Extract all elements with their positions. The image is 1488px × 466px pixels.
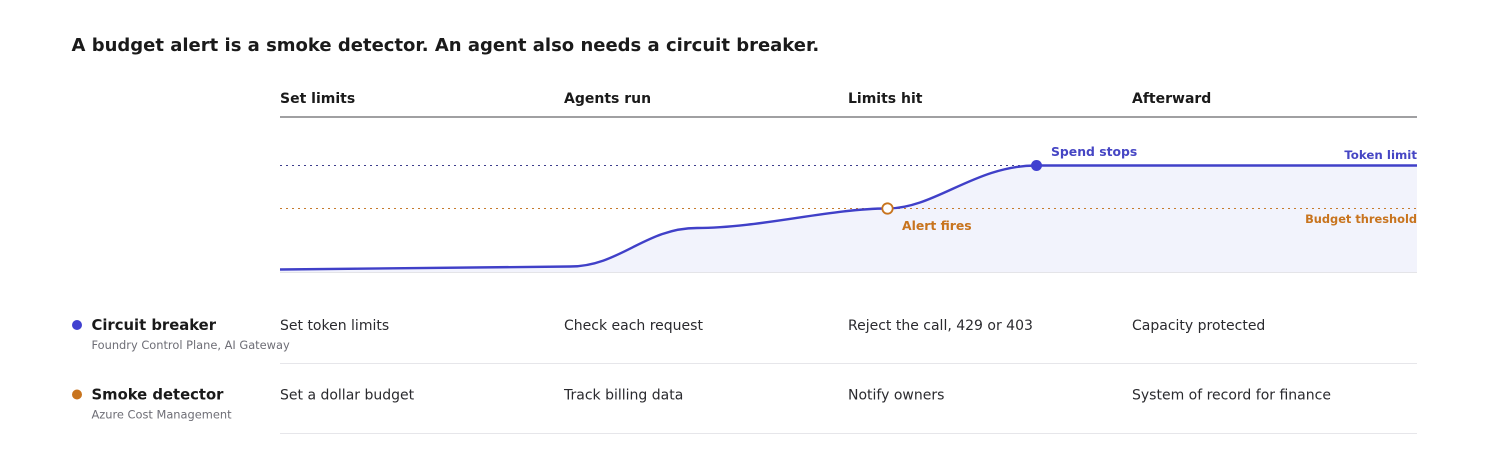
budget threshold dotted line bbox=[280, 208, 1417, 210]
spend line bbox=[280, 166, 1417, 270]
stop marker bbox=[1031, 160, 1042, 171]
row cells: Set token limits bbox=[280, 318, 389, 334]
row: smoke detector bbox=[72, 386, 1331, 422]
row: circuit breaker bbox=[72, 317, 1265, 352]
token limit dotted line bbox=[280, 164, 1036, 166]
row cells: Set a dollar budget bbox=[280, 388, 415, 404]
title: A budget alert is a smoke detector. An agent also needs a circuit breaker. bbox=[72, 35, 819, 56]
area under curve bbox=[280, 166, 1417, 272]
stage headers: Limits hit bbox=[848, 91, 923, 107]
row subtitle: Azure Cost Management bbox=[92, 408, 232, 422]
stage headers bbox=[280, 91, 1211, 107]
row cells bbox=[280, 388, 1331, 404]
legend dot bbox=[72, 320, 82, 330]
stage headers: Afterward bbox=[1132, 91, 1211, 107]
stage headers: Set limits bbox=[280, 91, 355, 107]
row subtitle: Foundry Control Plane, AI Gateway bbox=[92, 338, 290, 352]
label: budget threshold: Budget threshold bbox=[1305, 212, 1417, 226]
row cells: Reject the call, 429 or 403 bbox=[848, 318, 1033, 334]
row cells: System of record for finance bbox=[1132, 388, 1331, 404]
row cells: Capacity protected bbox=[1132, 318, 1265, 334]
legend dot bbox=[72, 390, 82, 400]
row cells: Check each request bbox=[564, 318, 703, 334]
row cells: Track billing data bbox=[563, 388, 683, 404]
chart: spend curve bbox=[280, 144, 1417, 272]
alert marker bbox=[882, 203, 893, 214]
label: token limit: Token limit bbox=[1344, 148, 1417, 162]
label: alert fires: Alert fires bbox=[902, 218, 972, 233]
label: spend stops: Spend stops bbox=[1051, 144, 1137, 159]
row title: Circuit breaker bbox=[92, 317, 217, 334]
row cells bbox=[280, 318, 1265, 334]
stage headers: Agents run bbox=[564, 91, 651, 107]
row title: Smoke detector bbox=[92, 386, 224, 404]
row cells: Notify owners bbox=[848, 388, 944, 404]
